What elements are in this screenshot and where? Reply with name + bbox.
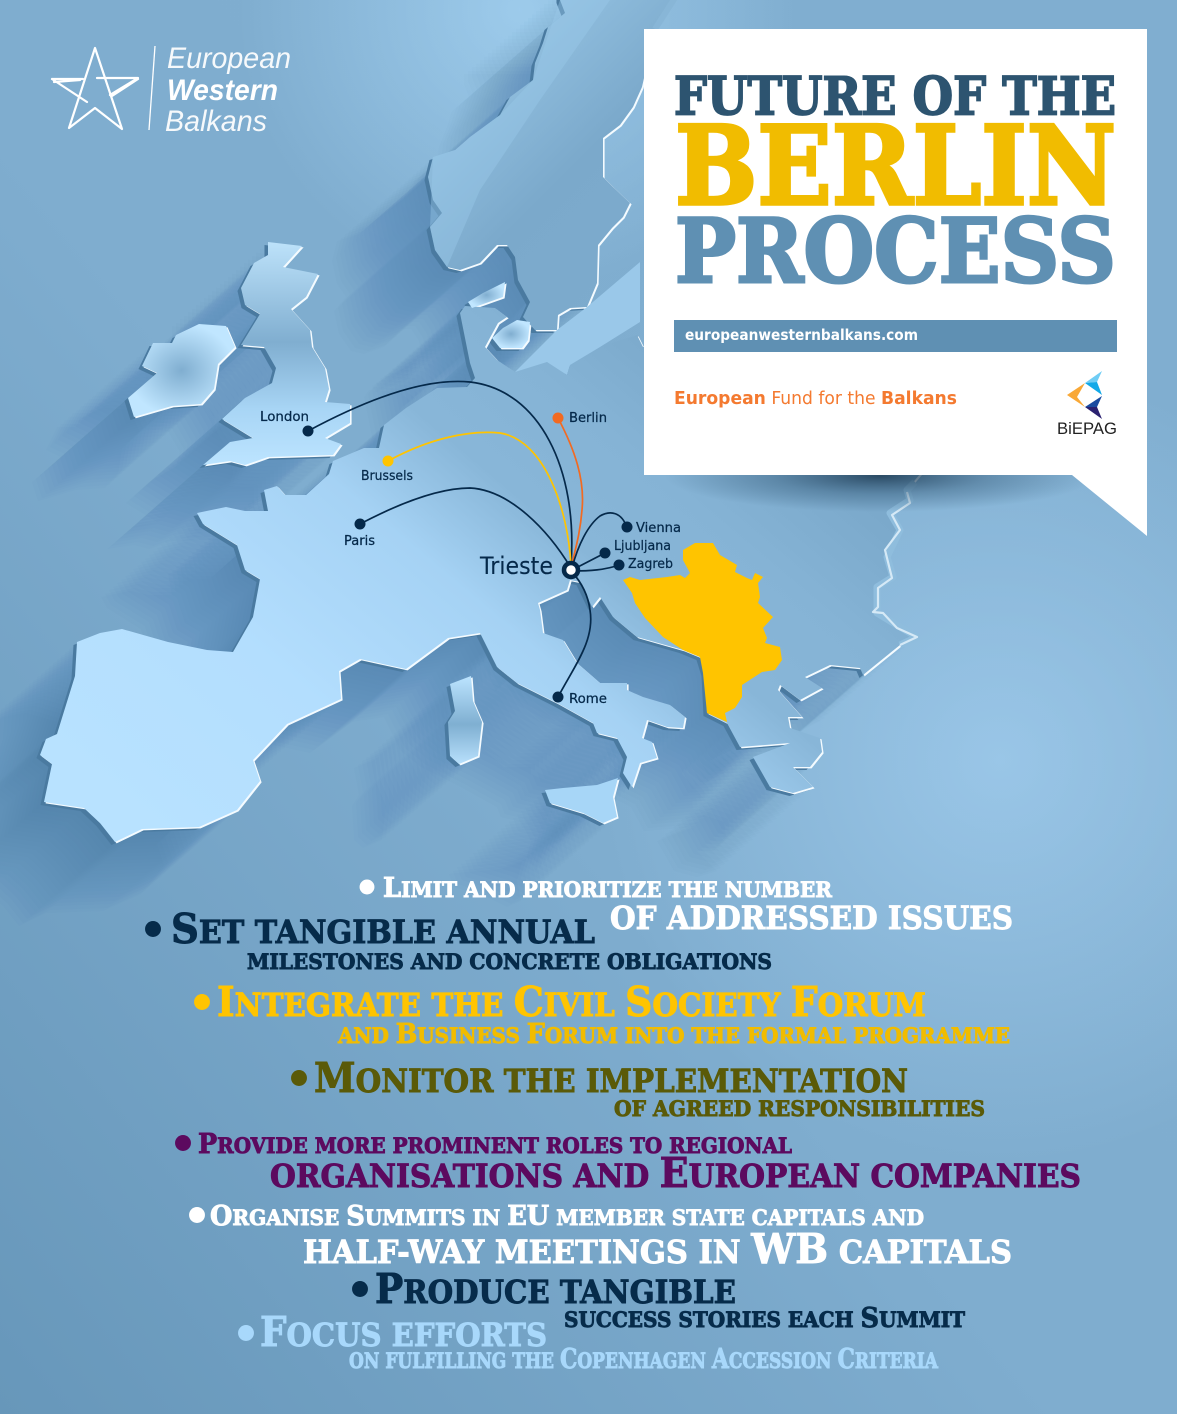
map: Corsica and Sardinia bbox=[448, 676, 482, 764]
recommendation 4: OF AGREED RESPONSIBILITIES bbox=[614, 1096, 985, 1121]
map: Scandinavia bbox=[428, 0, 680, 330]
logo wordmark bbox=[165, 42, 291, 138]
map: dark coast extrusion bbox=[36, 0, 996, 845]
map: Sicily bbox=[545, 778, 618, 823]
recommendation 7: PRODUCE TANGIBLE bbox=[375, 1265, 736, 1313]
BiEPAG logo: BiEPAG bbox=[1057, 419, 1117, 438]
recommendation 1: LIMIT AND PRIORITIZE THE NUMBER bbox=[383, 873, 832, 904]
panel: title card bbox=[644, 29, 1147, 536]
recommendation 1: OF ADDRESSED ISSUES bbox=[610, 899, 1013, 937]
website bar bbox=[674, 320, 1117, 352]
BiEPAG logo bbox=[1057, 371, 1117, 438]
city: London: London bbox=[260, 410, 309, 425]
logo wordmark: Balkans bbox=[165, 105, 267, 138]
map: long land shadows bbox=[0, 0, 996, 926]
map: Europe land masses bbox=[40, 0, 1000, 842]
icon: star bbox=[52, 48, 138, 129]
recommendation 1 bbox=[360, 873, 1013, 937]
map: Black Sea soft coast bbox=[873, 482, 917, 645]
title: FUTURE OF THE bbox=[674, 66, 1116, 128]
logo wordmark: European bbox=[167, 42, 291, 75]
recommendation 3 bbox=[194, 978, 1010, 1050]
recommendation 5 bbox=[176, 1129, 1081, 1197]
recommendation 7 bbox=[352, 1265, 965, 1334]
route lines to Trieste bbox=[308, 381, 627, 697]
map: white coast highlight bbox=[42, 0, 1002, 843]
recommendation 6: ORGANISE SUMMITS IN EU MEMBER STATE CAPITALS AND bbox=[210, 1201, 924, 1232]
logo: European Western Balkans bbox=[52, 42, 291, 138]
map: Western Balkans highlighted region bbox=[623, 543, 782, 722]
map: Ireland bbox=[128, 324, 235, 417]
recommendation 6 bbox=[190, 1201, 1012, 1273]
recommendation 8: FOCUS EFFORTS bbox=[260, 1308, 547, 1356]
recommendation 8: ON FULFILLING THE COPENHAGEN ACCESSION CRITERIA bbox=[349, 1344, 939, 1375]
recommendation 3: INTEGRATE THE CIVIL SOCIETY FORUM bbox=[217, 978, 926, 1026]
recommendation 2: MILESTONES AND CONCRETE OBLIGATIONS bbox=[247, 949, 772, 974]
city: Paris bbox=[344, 518, 375, 549]
city: Rome bbox=[552, 692, 607, 707]
city: Ljubljana: Ljubljana bbox=[614, 539, 671, 554]
recommendation 3: AND BUSINESS FORUM INTO THE FORMAL PROGRAMME bbox=[337, 1019, 1010, 1050]
city: Trieste hub: Trieste bbox=[479, 552, 553, 580]
website bar: europeanwesternbalkans.com bbox=[685, 326, 918, 344]
recommendation 4 bbox=[292, 1054, 985, 1121]
title: BERLIN bbox=[675, 102, 1116, 230]
city: Berlin: Berlin bbox=[569, 411, 607, 426]
recommendation 2: SET TANGIBLE ANNUAL bbox=[171, 905, 595, 953]
city: Ljubljana bbox=[600, 539, 671, 558]
logo wordmark: Western bbox=[167, 74, 278, 107]
city: Brussels bbox=[361, 456, 413, 484]
panel shadow bbox=[665, 440, 1095, 512]
city: Brussels: Brussels bbox=[361, 469, 413, 484]
recommendation 7: SUCCESS STORIES EACH SUMMIT bbox=[564, 1303, 965, 1334]
map: Danish islands bbox=[468, 282, 530, 348]
recommendation 5: PROVIDE MORE PROMINENT ROLES TO REGIONAL bbox=[198, 1129, 792, 1160]
city: Berlin bbox=[552, 411, 607, 426]
logo divider bbox=[149, 46, 155, 130]
map: Great Britain bbox=[203, 242, 350, 465]
recommendation 8 bbox=[238, 1308, 939, 1375]
European Fund for the Balkans: European Fund for the Balkans bbox=[674, 388, 957, 409]
city: Paris: Paris bbox=[344, 534, 375, 549]
title bbox=[674, 66, 1116, 303]
recommendation 2 bbox=[146, 905, 772, 974]
city: London bbox=[260, 410, 314, 436]
map: Baltic light band bbox=[515, 262, 640, 375]
recommendation 5: ORGANISATIONS AND EUROPEAN COMPANIES bbox=[270, 1149, 1081, 1197]
map: continental Europe bbox=[40, 306, 1000, 842]
recommendation 4: MONITOR THE IMPLEMENTATION bbox=[314, 1054, 908, 1102]
recommendation 6: HALF-WAY MEETINGS IN WB CAPITALS bbox=[303, 1225, 1012, 1273]
city: Rome: Rome bbox=[569, 692, 607, 707]
title: PROCESS bbox=[675, 199, 1116, 303]
city: Vienna: Vienna bbox=[636, 521, 681, 536]
city: Zagreb: Zagreb bbox=[628, 557, 673, 572]
